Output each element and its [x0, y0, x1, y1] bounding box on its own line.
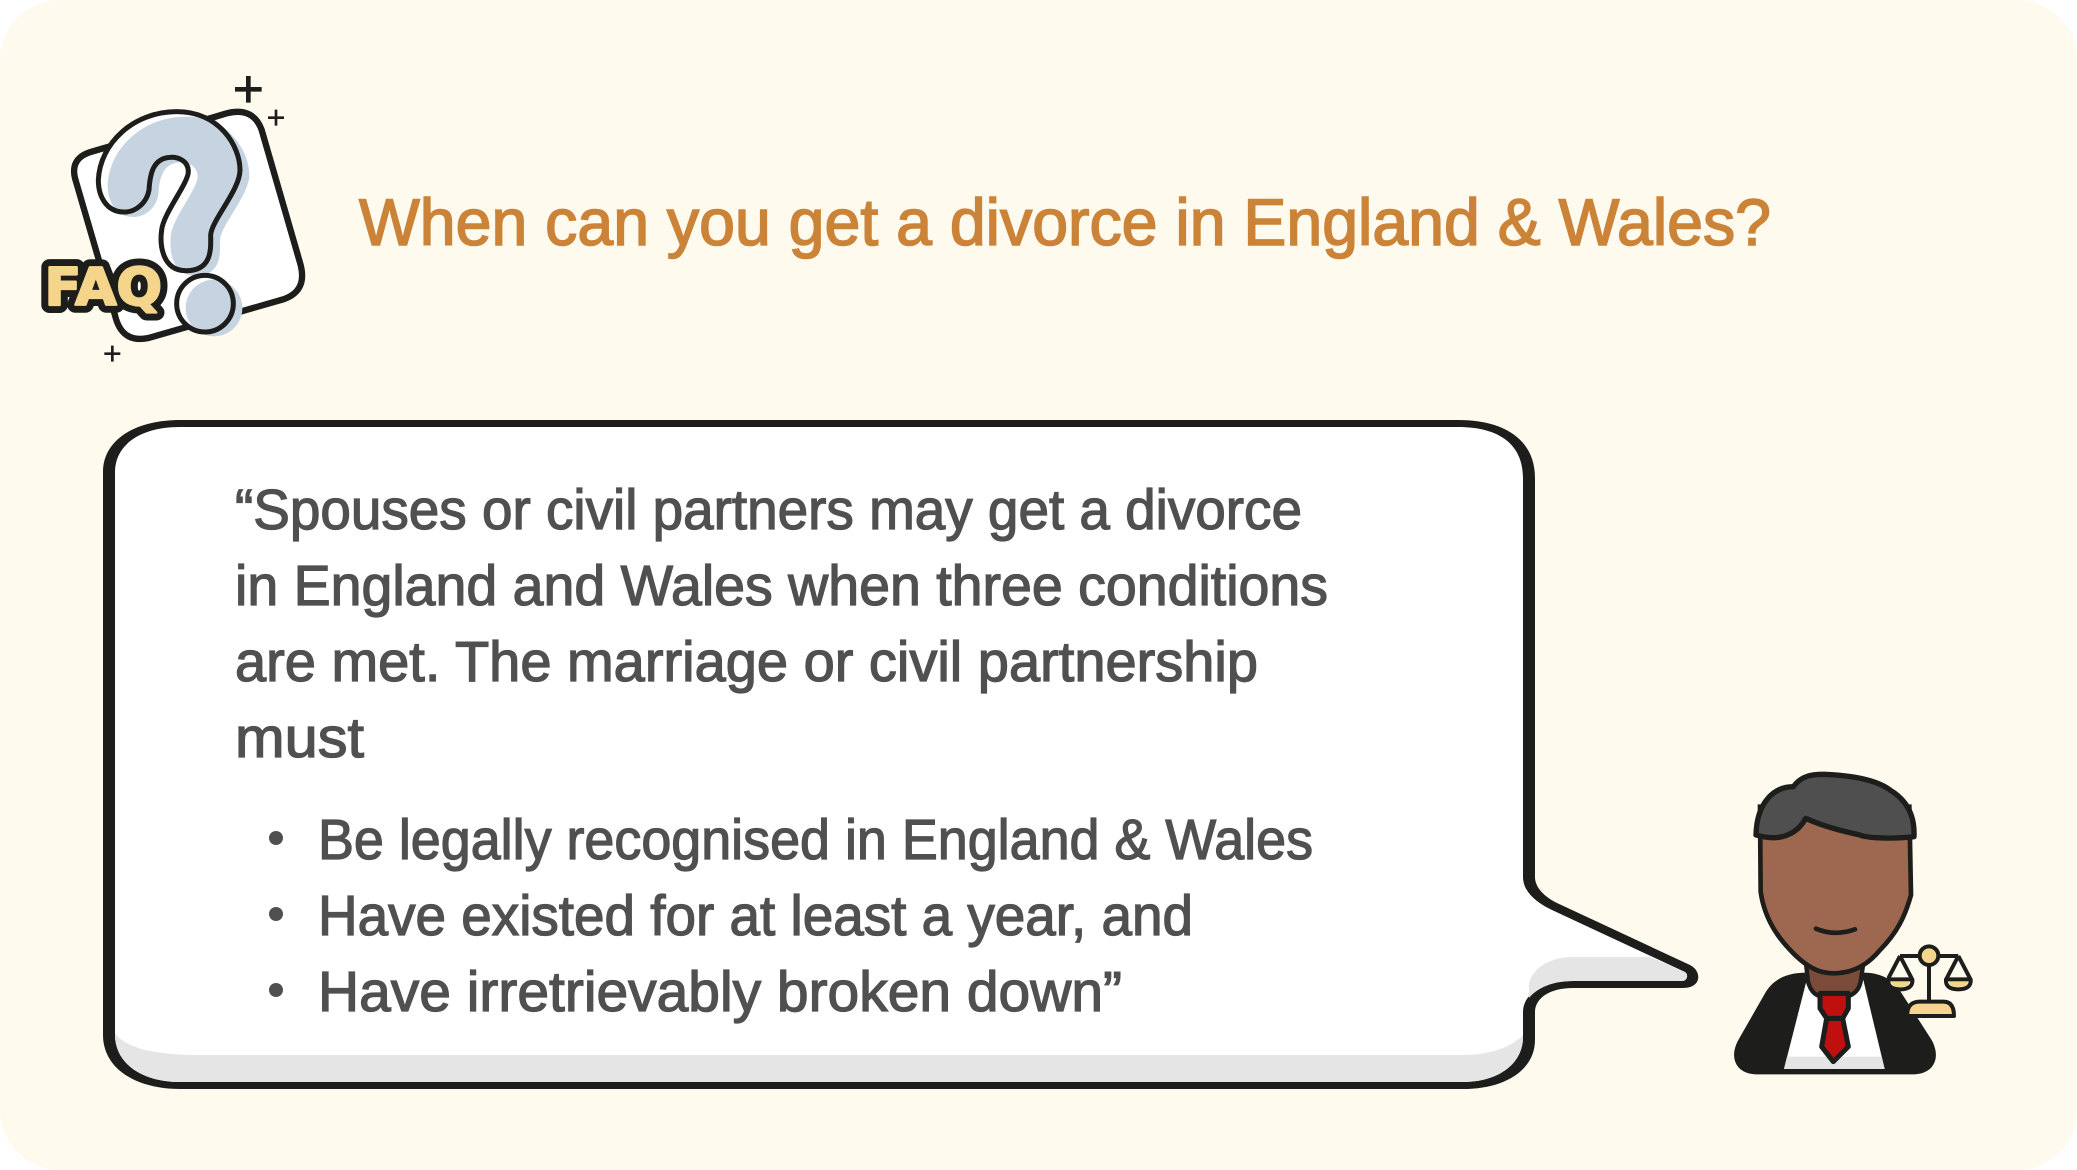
- speech bubble fill: [115, 427, 1687, 1082]
- icon: tilted white card: [74, 112, 302, 339]
- quote text: “Spouses or civil partners may get a divorce: [235, 478, 1302, 542]
- icon: FAQ label: FAQ: [45, 258, 162, 318]
- lawyer hair: [1756, 774, 1914, 838]
- speech bubble tail shade: [1529, 957, 1687, 998]
- icon: FAQ label: FAQ: [45, 258, 162, 318]
- lawyer jacket: [1734, 973, 1936, 1074]
- icon: FAQ question mark card: [45, 76, 302, 362]
- icon: sparkles: [104, 76, 284, 362]
- speech bubble bottom shade: [115, 1033, 1523, 1082]
- lawyer tie: [1820, 993, 1848, 1062]
- quote text: in England and Wales when three conditions: [235, 554, 1328, 618]
- bullet list: Be legally recognised in England & Wales: [318, 808, 1313, 872]
- bullet list: Have existed for at least a year, and: [318, 884, 1193, 948]
- title: When can you get a divorce in England & Wales?: [359, 185, 1771, 259]
- bullet list: Have irretrievably broken down”: [318, 960, 1122, 1024]
- icon: question mark: [98, 112, 249, 336]
- lawyer shirt: [1784, 980, 1885, 1069]
- icon: lawyer with scales: [1734, 774, 1971, 1074]
- lawyer face: [1760, 807, 1911, 973]
- speech bubble outline: [103, 420, 1698, 1089]
- lawyer neck: [1806, 963, 1863, 997]
- quote text: are met. The marriage or civil partnership: [235, 630, 1258, 694]
- quote text: must: [235, 706, 364, 770]
- panel: speech bubble: [103, 420, 1698, 1089]
- icon: scales of justice: [1888, 946, 1971, 1016]
- lawyer smile: [1816, 929, 1855, 933]
- bullet list: [269, 808, 1313, 1024]
- quote text: [235, 478, 1328, 770]
